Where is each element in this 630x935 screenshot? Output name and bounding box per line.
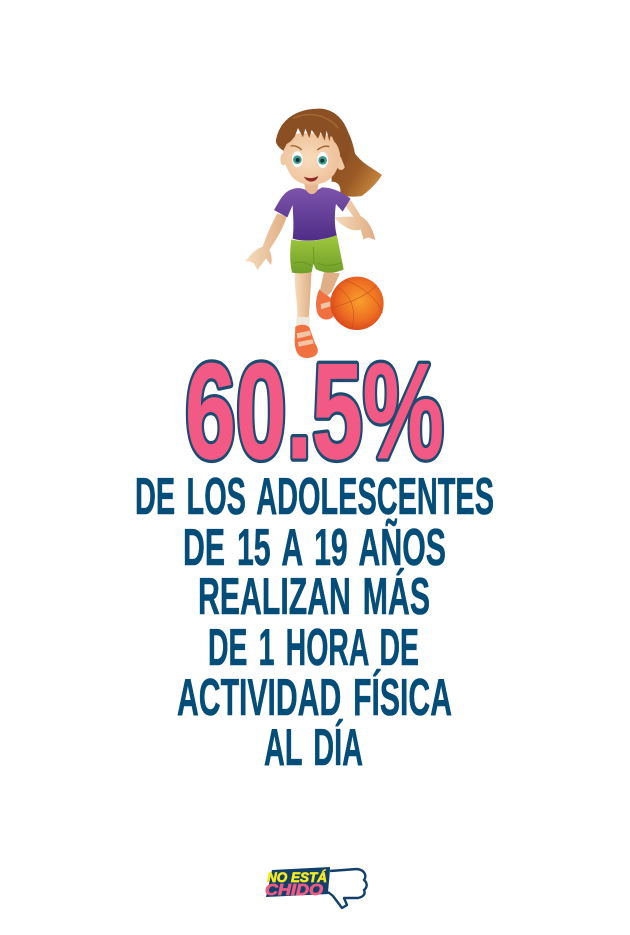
sock — [296, 317, 310, 327]
icon: thumbs down — [328, 869, 367, 908]
logo backing — [266, 867, 330, 897]
line 3: REALIZAN MÁS — [198, 568, 430, 626]
front shoe — [295, 325, 318, 358]
line 2: DE 15 A 19 AÑOS — [183, 518, 446, 577]
statement text — [135, 468, 494, 777]
number outline: 60.5% — [185, 335, 444, 487]
basketball — [330, 277, 384, 330]
eyes — [292, 151, 328, 168]
shirt — [274, 187, 351, 241]
ponytail — [330, 115, 382, 197]
neck — [304, 180, 319, 194]
icon: girl dribbling a basketball — [245, 109, 384, 358]
right arm and hand — [334, 200, 375, 240]
face — [283, 133, 340, 185]
eyebrows — [291, 146, 329, 150]
hair top and bangs — [276, 109, 350, 168]
line 4: DE 1 HORA DE — [208, 619, 419, 677]
shorts — [290, 234, 344, 273]
left ear — [280, 153, 286, 165]
line 6: AL DÍA — [264, 719, 363, 777]
ear — [336, 157, 346, 170]
logo wordmark top: NO ESTÁ — [267, 869, 327, 885]
left arm and hand — [245, 213, 287, 270]
logo: No está chido — [265, 867, 367, 908]
hair highlight — [293, 115, 338, 128]
number fill: 60.5% — [185, 335, 444, 487]
logo wordmark bottom: CHIDO — [265, 882, 324, 899]
mouth — [304, 176, 318, 182]
headline number: 60.5% — [185, 335, 444, 487]
front leg — [295, 268, 312, 318]
back leg and shoe — [316, 272, 340, 320]
